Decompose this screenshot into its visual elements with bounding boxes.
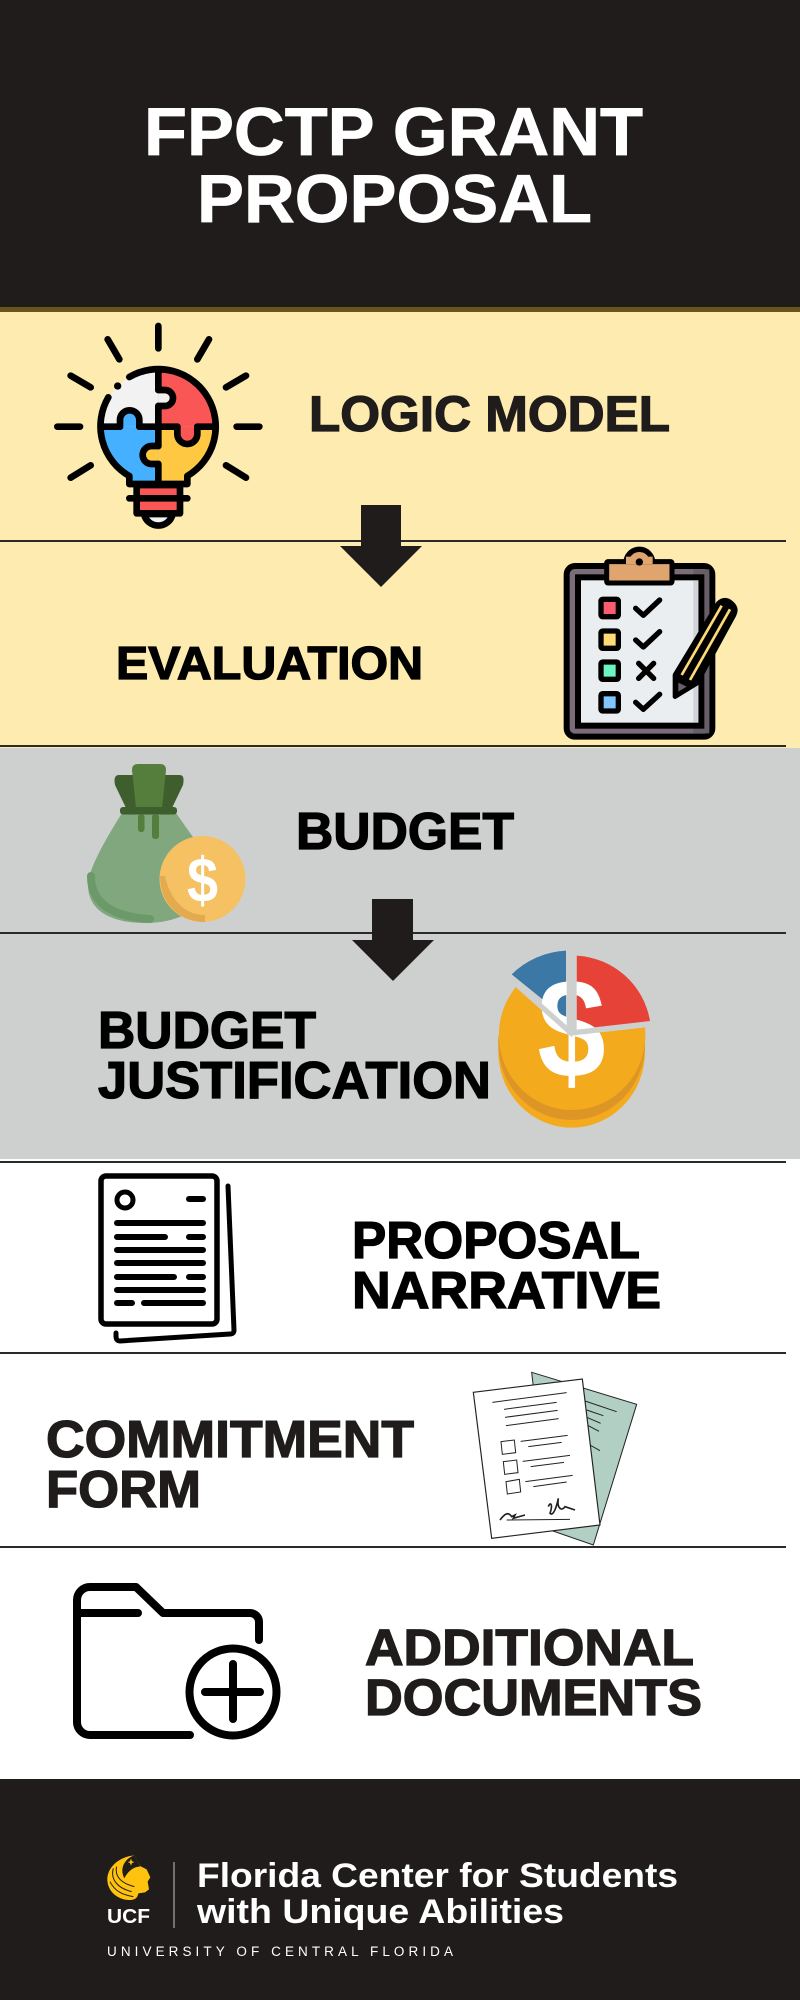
- title: PROPOSAL: [197, 161, 592, 237]
- panel: additional documents: [77, 1587, 702, 1736]
- heading: budget justification: JUSTIFICATION: [98, 1052, 491, 1110]
- panel: budget justification: [0, 934, 800, 1159]
- heading: commitment form: COMMITMENT: [46, 1411, 414, 1469]
- text: center name: [196, 1857, 678, 1931]
- text: center name: Florida Center for Students: [197, 1857, 678, 1895]
- heading: additional documents: [365, 1619, 702, 1726]
- icon: coin pie chart: [498, 948, 652, 1128]
- panel: proposal narrative: [101, 1176, 661, 1341]
- logo: UCF pegasus: [107, 1855, 150, 1928]
- icon: money bag: $: [187, 846, 218, 916]
- arrow: budget to budget justification: [352, 899, 434, 981]
- icon: money bag: [88, 764, 246, 923]
- heading: evaluation: EVALUATION: [116, 637, 423, 689]
- text: university name: UNIVERSITY OF CENTRAL FLORIDA: [107, 1944, 453, 1959]
- heading: additional documents: ADDITIONAL: [365, 1619, 694, 1676]
- header banner: [0, 0, 800, 312]
- divider: [173, 1862, 175, 1928]
- icon: clipboard checklist: [567, 549, 735, 737]
- heading: budget: BUDGET: [296, 803, 514, 861]
- panel: evaluation: [0, 542, 800, 748]
- icon: stacked documents: [101, 1176, 234, 1341]
- icon: folder with plus: [77, 1587, 276, 1736]
- panel: commitment form: [46, 1372, 637, 1545]
- text: center name: with Unique Abilities: [196, 1893, 564, 1931]
- heading: budget justification: [98, 1002, 491, 1110]
- heading: commitment form: [46, 1411, 414, 1519]
- heading: additional documents: DOCUMENTS: [365, 1669, 702, 1726]
- footer: [0, 1779, 800, 2000]
- title: [144, 94, 643, 237]
- panel: budget: [0, 748, 800, 934]
- logo: UCF pegasus: UCF: [107, 1906, 150, 1928]
- icon: puzzle light bulb: [57, 326, 259, 526]
- heading: budget justification: BUDGET: [98, 1002, 316, 1060]
- heading: proposal narrative: [352, 1212, 661, 1320]
- icon: coin pie chart: $: [537, 950, 606, 1108]
- heading: logic model: LOGIC MODEL: [309, 386, 670, 442]
- arrow: logic model to evaluation: [340, 505, 422, 587]
- heading: proposal narrative: PROPOSAL: [352, 1212, 640, 1270]
- heading: commitment form: FORM: [46, 1461, 201, 1519]
- panel: logic model: [0, 312, 800, 542]
- title: FPCTP GRANT: [144, 94, 643, 170]
- icon: signed forms: [473, 1372, 637, 1545]
- heading: proposal narrative: NARRATIVE: [352, 1262, 661, 1320]
